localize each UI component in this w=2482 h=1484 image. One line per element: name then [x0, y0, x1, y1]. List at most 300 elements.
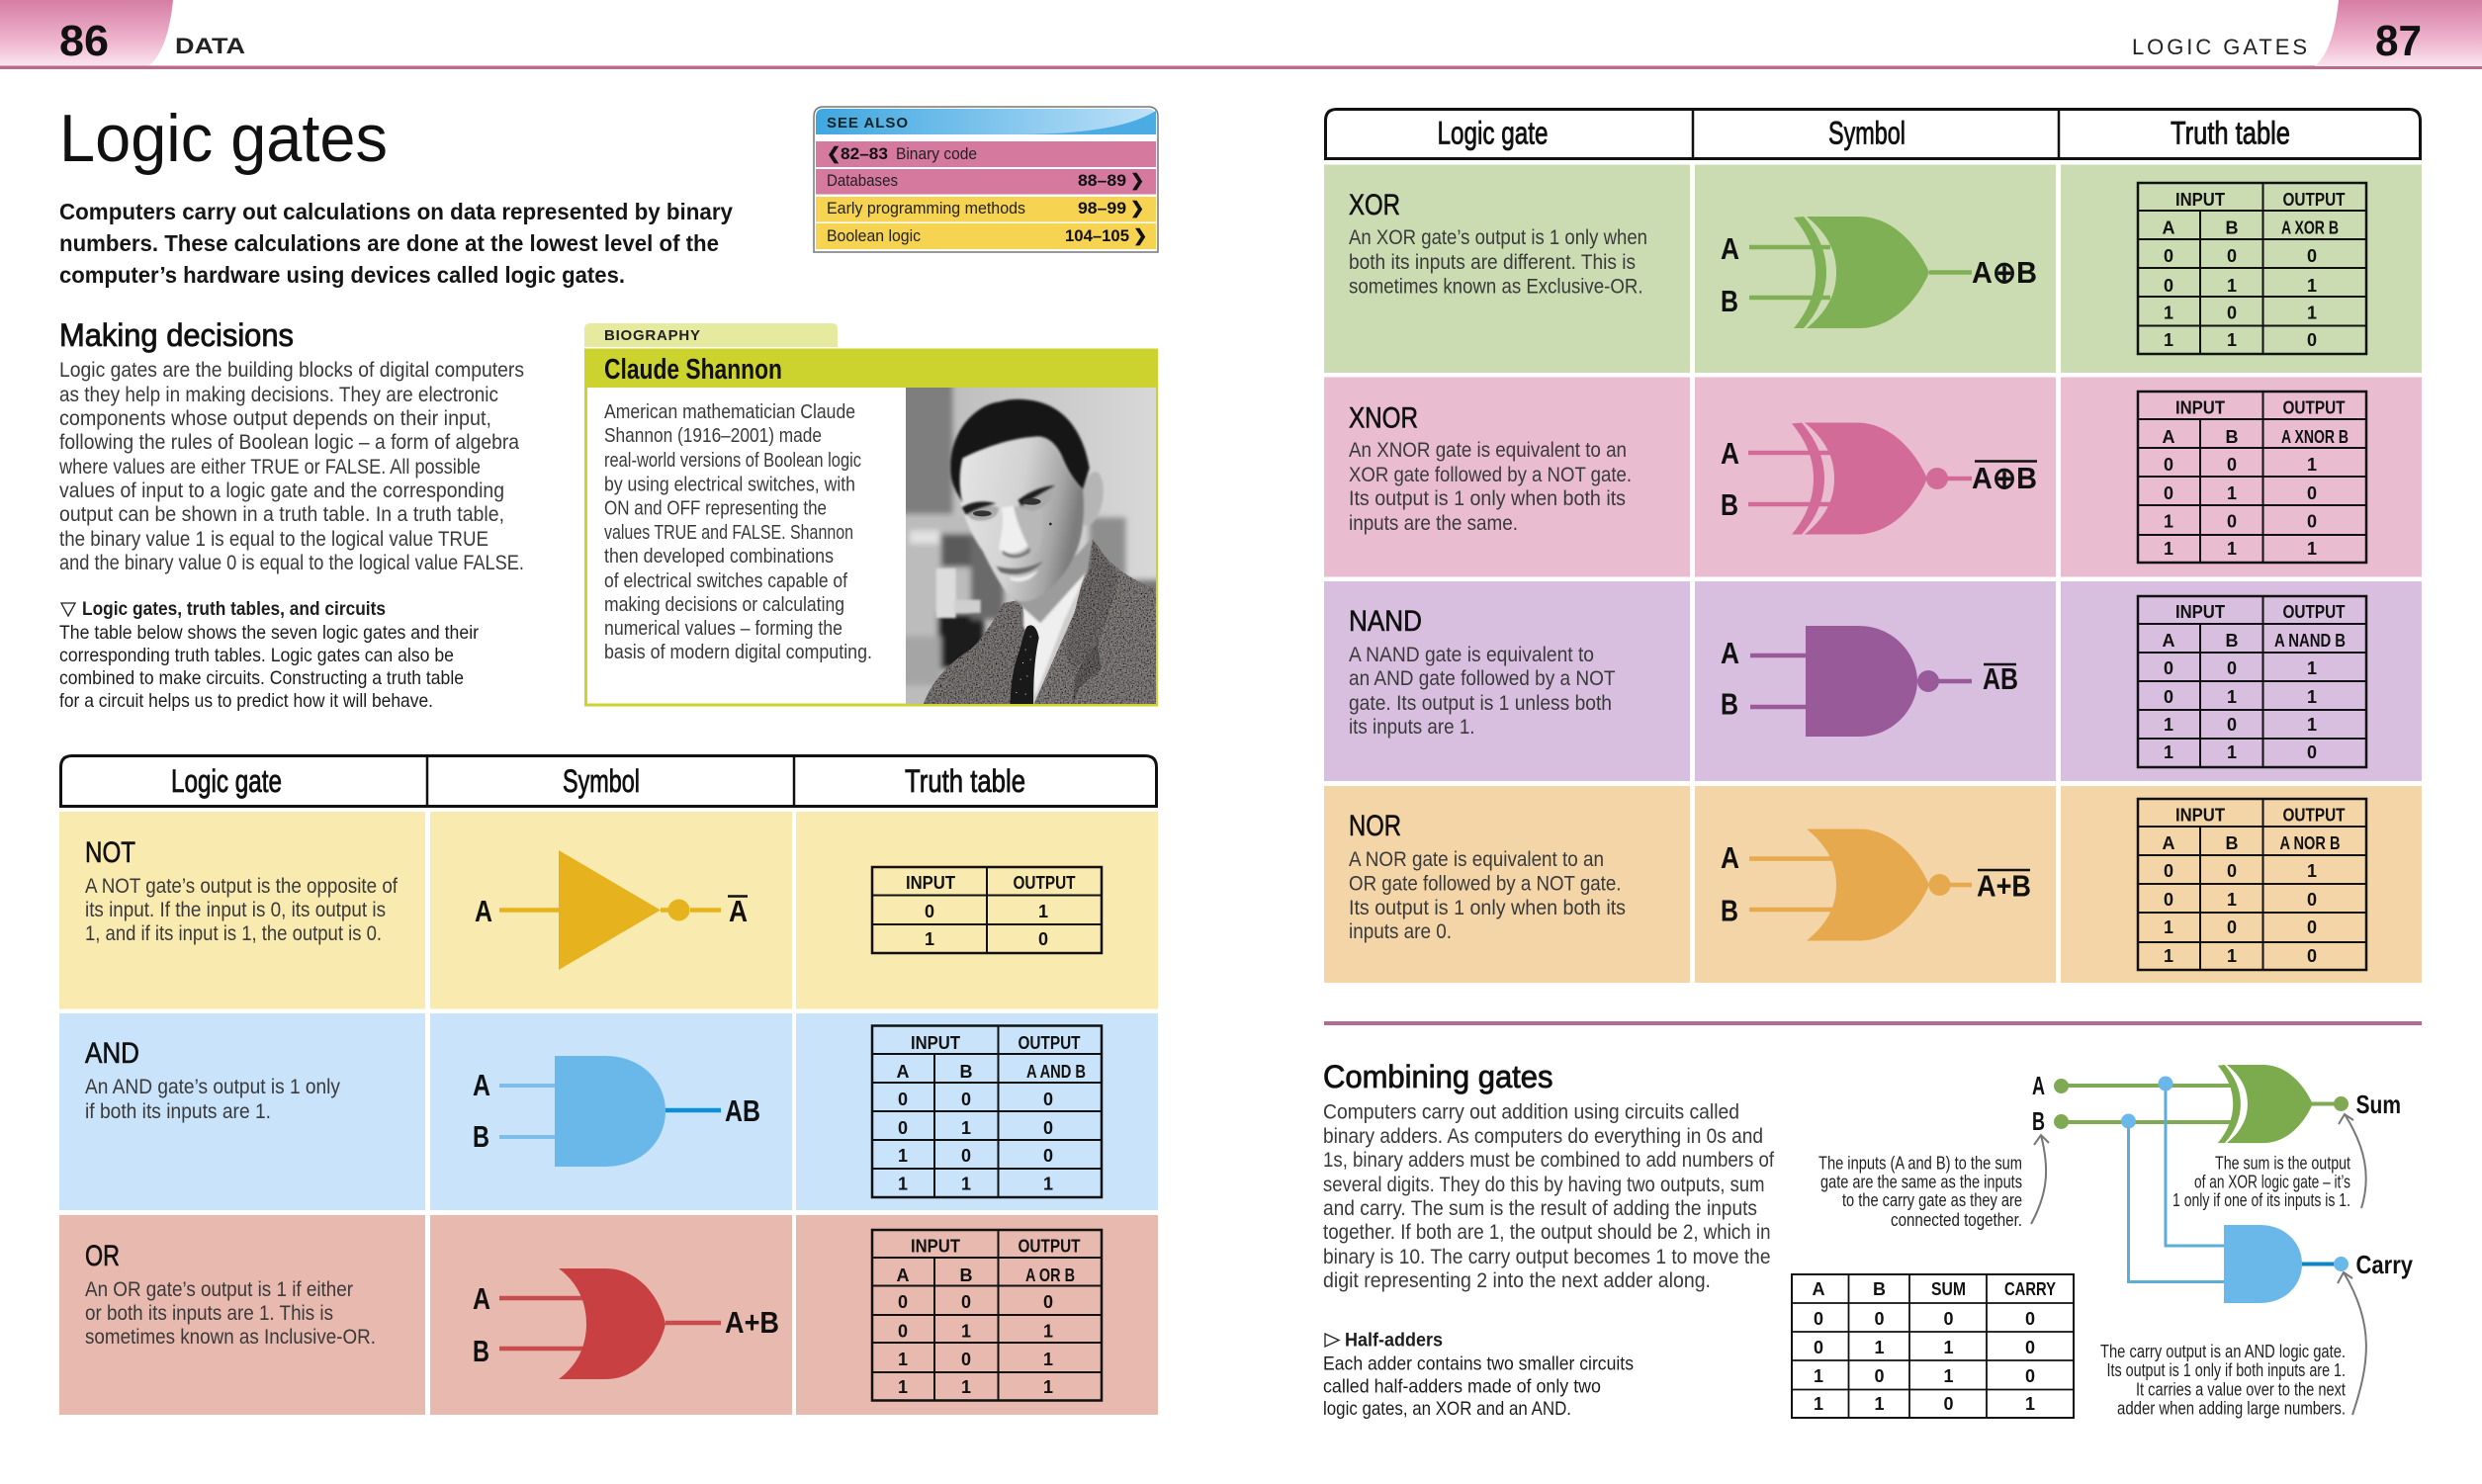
panel: XNOR gate row: Its output is 1 only when both its: [1349, 487, 1626, 510]
text block: making decisions body: Logic gates are the building blocks of digital computers: [59, 359, 524, 382]
icon: AND gate symbol: AB: [725, 1093, 760, 1128]
text block: combining gates body: several digits. They do this by having two outputs, sum: [1323, 1174, 1764, 1196]
truth table: OR: A OR B: [1025, 1266, 1075, 1285]
truth table: XOR: 0: [2227, 246, 2237, 266]
truth table: XNOR: 1: [2227, 483, 2237, 503]
annotation: inputs: to the carry gate as they are: [1842, 1190, 2022, 1210]
icon: OR gate symbol: A: [473, 1281, 490, 1316]
annotation: sum: of an XOR logic gate – it’s: [2194, 1173, 2350, 1192]
table header: left page: Truth table: [905, 763, 1025, 799]
panel: OR gate row: An OR gate’s output is 1 if either: [85, 1278, 353, 1301]
panel: see also: SEE ALSO: [827, 115, 908, 131]
truth table: XNOR: 0: [2307, 512, 2317, 532]
panel: see also: 82–83: [841, 144, 888, 163]
icon: XNOR gate symbol: A: [1721, 436, 1739, 471]
left page header: DATA: [175, 34, 245, 58]
table header: right page: [1325, 109, 2421, 159]
truth table: OR: 0: [898, 1321, 908, 1341]
truth table: AND: 0: [1043, 1090, 1053, 1109]
panel: XNOR gate row: XOR gate followed by a NOT gate.: [1349, 464, 1632, 486]
truth table: XOR: 0: [2164, 276, 2173, 296]
truth table: NOT: [872, 867, 1102, 953]
truth table: NOR: 0: [2307, 890, 2317, 910]
icon: NOT gate symbol: [475, 850, 748, 970]
truth table: OR: 0: [898, 1292, 908, 1312]
truth table: AND: 0: [898, 1090, 908, 1109]
truth table: XOR: 1: [2227, 330, 2237, 350]
truth table: NAND: 0: [2164, 658, 2173, 678]
text block: logic gates, truth tables, and circuits: The table below shows the seven logic gates and their: [59, 622, 479, 644]
truth table: NAND: A NAND B: [2274, 631, 2346, 651]
icon: OR gate symbol: [473, 1268, 779, 1379]
truth table: OR: 1: [898, 1350, 908, 1369]
panel: biography Claude Shannon: [584, 323, 1164, 712]
truth table: XNOR: 1: [2164, 512, 2173, 532]
diagram: half-adder circuit: A: [2032, 1071, 2045, 1100]
icon: XOR gate symbol: A: [1721, 231, 1739, 266]
truth table: NOR: B: [2225, 833, 2239, 853]
truth table: half-adder: 0: [1814, 1309, 1823, 1329]
biography text: real-world versions of Boolean logic: [604, 449, 861, 472]
truth table: NAND: 0: [2227, 658, 2237, 678]
annotation: inputs: connected together.: [1891, 1210, 2022, 1230]
truth table: NOT: 0: [1038, 929, 1048, 949]
panel: see also: 98–99: [1078, 199, 1126, 218]
text block: making decisions body: and the binary value 0 is equal to the logical value FALSE.: [59, 552, 524, 574]
diagram: half-adder circuit: Carry: [2355, 1250, 2413, 1279]
right page header: LOGIC GATES: [2132, 35, 2307, 59]
truth table: XNOR: 0: [2164, 455, 2173, 475]
truth table: NOR: INPUT: [2175, 805, 2225, 825]
annotation: carry: Its output is 1 only if both inputs are 1.: [2106, 1360, 2346, 1380]
panel: see also: 104–105: [1065, 226, 1129, 245]
truth table: XOR: 0: [2307, 330, 2317, 350]
panel: XOR gate row: An XOR gate’s output is 1 only when: [1349, 226, 1647, 249]
text block: half-adders: logic gates, an XOR and an AND.: [1323, 1398, 1571, 1420]
truth table: half-adder: 0: [1943, 1394, 1954, 1414]
biography text: making decisions or calculating: [604, 593, 844, 616]
truth table: half-adder: 0: [1874, 1366, 1885, 1386]
icon: XOR gate symbol: A⊕B: [1972, 255, 2037, 290]
icon: OR gate symbol: B: [473, 1334, 489, 1368]
truth table: OR: 0: [961, 1292, 971, 1312]
truth table: NOT: OUTPUT: [1013, 873, 1076, 893]
truth table: NAND: 1: [2227, 687, 2237, 707]
truth table: NOT: INPUT: [906, 873, 955, 893]
truth table: NAND: 0: [2227, 715, 2237, 735]
truth table: NOR: OUTPUT: [2282, 805, 2346, 825]
truth table: XOR: A XOR B: [2281, 218, 2339, 237]
annotation: carry: [2100, 1342, 2346, 1418]
jacket: [923, 539, 1157, 705]
truth table: XOR: A: [2162, 218, 2175, 237]
truth table: NAND: 0: [2307, 742, 2317, 762]
truth table: AND: 0: [961, 1090, 971, 1109]
biography text: values TRUE and FALSE. Shannon: [604, 521, 853, 544]
annotation: sum: 1 only if one of its inputs is 1.: [2172, 1190, 2350, 1210]
truth table: NAND: 1: [2227, 742, 2237, 762]
truth table: OR: B: [959, 1266, 973, 1285]
truth table: OR: 1: [1043, 1321, 1053, 1341]
text block: logic gates, truth tables, and circuits: [59, 598, 479, 712]
truth table: XOR: 1: [2307, 276, 2317, 296]
truth table: AND: 1: [898, 1175, 908, 1194]
panel: XOR gate row: sometimes known as Exclusive-OR.: [1349, 275, 1643, 299]
panel: see also: ❯: [1130, 171, 1144, 191]
intro paragraph: [59, 199, 733, 288]
truth table: half-adder: SUM: [1931, 1279, 1966, 1299]
truth table: AND: OUTPUT: [1019, 1033, 1080, 1053]
face: [958, 436, 1084, 601]
truth table: NOT: 0: [925, 902, 934, 921]
truth table: half-adder: CARRY: [2004, 1279, 2056, 1299]
icon: AND gate symbol: A: [473, 1068, 490, 1102]
heading: combining gates: Combining gates: [1323, 1059, 1552, 1094]
panel: NOR gate row: Its output is 1 only when both its: [1349, 897, 1626, 919]
truth table: NAND: 1: [2307, 715, 2317, 735]
truth table: half-adder: 0: [1943, 1309, 1954, 1329]
panel: AND gate row: An AND gate’s output is 1 only: [85, 1076, 340, 1098]
icon: XOR gate symbol: B: [1721, 284, 1738, 318]
text block: logic gates, truth tables, and circuits: for a circuit helps us to predict how it will behave.: [59, 690, 433, 712]
panel: AND gate row: [59, 1013, 1158, 1210]
truth table: half-adder: 1: [1814, 1394, 1823, 1414]
right page header: [2132, 0, 2482, 66]
text block: making decisions body: following the rules of Boolean logic – a form of algebra: [59, 431, 519, 454]
icon: XNOR gate symbol: A⊕B: [1972, 461, 2037, 495]
panel: NAND gate row: its inputs are 1.: [1349, 716, 1475, 739]
icon: NOR gate symbol: A+B: [1977, 868, 2031, 904]
panel: XNOR gate row: XNOR: [1349, 401, 1418, 435]
intro paragraph: Computers carry out calculations on data represented by binary: [59, 199, 733, 224]
truth table: AND: 0: [898, 1118, 908, 1138]
biography text: ON and OFF representing the: [604, 496, 827, 520]
panel: NOR gate row: NOR: [1349, 810, 1401, 842]
table header: left page: [61, 755, 1157, 807]
panel: XNOR gate row: An XNOR gate is equivalent to an: [1349, 439, 1627, 462]
truth table: NOT: 1: [925, 929, 934, 949]
truth table: half-adder: [1792, 1274, 2074, 1418]
truth table: NAND: 1: [2164, 742, 2173, 762]
truth table: half-adder: 1: [1814, 1366, 1823, 1386]
truth table: AND: A: [896, 1062, 910, 1082]
truth table: XNOR: 0: [2307, 483, 2317, 503]
text block: half-adders: Each adder contains two smaller circuits: [1323, 1353, 1634, 1374]
truth table: NAND: INPUT: [2175, 602, 2225, 622]
biography text: American mathematician Claude: [604, 400, 855, 423]
truth table: NOR: 0: [2227, 861, 2237, 881]
truth table: OR: INPUT: [911, 1236, 960, 1256]
icon: NAND gate symbol: AB: [1983, 661, 2018, 696]
truth table: XNOR: OUTPUT: [2282, 397, 2346, 417]
text block: half-adders: Half-adders: [1345, 1329, 1443, 1351]
truth table: XOR: 0: [2227, 303, 2237, 322]
text block: logic gates, truth tables, and circuits: combined to make circuits. Constructing a truth table: [59, 667, 464, 689]
truth table: AND: A AND B: [1026, 1062, 1086, 1082]
truth table: half-adder: 0: [2025, 1338, 2035, 1357]
panel: NAND gate row: NAND: [1349, 605, 1422, 638]
truth table: NAND: 1: [2164, 715, 2173, 735]
heading: making decisions: Making decisions: [59, 317, 294, 353]
truth table: XOR: B: [2225, 218, 2239, 237]
biography text: [604, 400, 872, 663]
truth table: XNOR: 1: [2307, 539, 2317, 559]
panel: OR gate row: OR: [85, 1240, 120, 1272]
intro paragraph: numbers. These calculations are done at the lowest level of the: [59, 230, 719, 256]
truth table: NAND: 0: [2164, 687, 2173, 707]
annotation: carry: The carry output is an AND logic gate.: [2100, 1342, 2346, 1361]
truth table: NOR: 0: [2164, 861, 2173, 881]
truth table: AND: 1: [898, 1146, 908, 1166]
truth table: NOR: 0: [2227, 917, 2237, 937]
truth table: NOR: 1: [2164, 946, 2173, 966]
panel: XOR gate row: both its inputs are different. This is: [1349, 251, 1636, 274]
annotation: inputs: The inputs (A and B) to the sum: [1818, 1153, 2022, 1173]
truth table: AND: B: [959, 1062, 973, 1082]
truth table: OR: 1: [898, 1377, 908, 1397]
truth table: AND: 0: [1043, 1146, 1053, 1166]
left page header: [0, 0, 2482, 69]
diagram: half-adder circuit: [2032, 1065, 2413, 1303]
text block: making decisions body: as they help in making decisions. They are electronic: [59, 384, 498, 406]
truth table: NAND: OUTPUT: [2282, 602, 2346, 622]
truth table: AND: 1: [961, 1118, 971, 1138]
truth table: half-adder: 0: [2025, 1309, 2035, 1329]
icon: NAND gate symbol: B: [1721, 686, 1738, 722]
panel: see also: Binary code: [896, 144, 977, 163]
annotation: sum: [2172, 1153, 2350, 1210]
text block: logic gates, truth tables, and circuits: corresponding truth tables. Logic gates can also be: [59, 645, 454, 666]
truth table: OR: A: [896, 1266, 910, 1285]
truth table: AND: 0: [961, 1146, 971, 1166]
truth table: XNOR: A XNOR B: [2281, 427, 2349, 447]
text block: making decisions body: where values are either TRUE or FALSE. All possible: [58, 456, 481, 479]
panel: see also: ❯: [1133, 226, 1147, 246]
truth table: XNOR: 0: [2227, 512, 2237, 532]
text block: making decisions body: the binary value 1 is equal to the logical value TRUE: [59, 528, 488, 551]
annotation: carry: adder when adding large numbers.: [2117, 1398, 2346, 1418]
truth table: XOR: 1: [2227, 276, 2237, 296]
panel: NAND gate row: an AND gate followed by a NOT: [1349, 667, 1616, 690]
truth table: NOR: 1: [2227, 890, 2237, 910]
diagram: half-adder circuit: Sum: [2355, 1090, 2401, 1119]
icon: AND gate symbol: [473, 1056, 760, 1167]
annotation: inputs: [1818, 1153, 2022, 1230]
panel: see also: ❯: [1130, 199, 1144, 218]
biography text: by using electrical switches, with: [604, 473, 855, 496]
table header: right page: Symbol: [1828, 115, 1906, 150]
truth table: NAND: 1: [2307, 687, 2317, 707]
truth table: XOR: 0: [2307, 246, 2317, 266]
panel: XNOR gate row: [1324, 378, 2422, 577]
truth table: XNOR: 1: [2227, 539, 2237, 559]
panel: NOT gate row: A NOT gate’s output is the opposite of: [85, 875, 398, 898]
truth table: XNOR: [2138, 392, 2366, 563]
truth table: XNOR: INPUT: [2175, 397, 2225, 417]
truth table: XOR: [2138, 183, 2366, 354]
tie: [1011, 625, 1039, 705]
text block: combining gates body: 1s, binary adders must be combined to add numbers of: [1323, 1149, 1774, 1172]
left page header: 86: [59, 17, 109, 65]
panel: NOR gate row: inputs are 0.: [1349, 920, 1452, 943]
photo: portrait of Claude Shannon: [906, 388, 1156, 704]
title: Logic gates: [59, 101, 388, 176]
panel: NAND gate row: [1324, 581, 2422, 781]
panel: NOT gate row: [59, 812, 1158, 1008]
text block: combining gates body: binary is 10. The carry output becomes 1 to move the: [1323, 1246, 1770, 1268]
panel: XOR gate row: XOR: [1349, 189, 1400, 221]
truth table: NOR: A NOR B: [2280, 833, 2340, 853]
icon: NOT gate symbol: A: [729, 894, 748, 928]
truth table: half-adder: 1: [1874, 1338, 1885, 1357]
icon: NAND gate symbol: [1721, 626, 2018, 737]
truth table: NOR: 1: [2164, 917, 2173, 937]
panel: XNOR gate row: inputs are the same.: [1349, 512, 1518, 535]
panel: OR gate row: [59, 1215, 1158, 1415]
truth table: OR: 1: [961, 1377, 971, 1397]
icon: XNOR gate symbol: B: [1721, 487, 1738, 522]
truth table: half-adder: 1: [1874, 1394, 1885, 1414]
arrow: carry: [2338, 1272, 2366, 1415]
text block: making decisions body: values of input to a logic gate and the corresponding: [59, 480, 504, 502]
text block: combining gates body: Computers carry out addition using circuits called: [1323, 1101, 1739, 1123]
icon: XOR gate symbol: [1721, 217, 2037, 328]
truth table: half-adder: 1: [2025, 1394, 2035, 1414]
panel: see also: ❮: [827, 144, 841, 164]
arrow: sum: [2339, 1114, 2366, 1208]
biography text: basis of modern digital computing.: [604, 641, 872, 663]
text block: making decisions body: components whose output depends on their input,: [59, 407, 491, 430]
panel: see also: 88–89: [1078, 171, 1126, 190]
truth table: NOR: [2138, 799, 2366, 970]
truth table: half-adder: 0: [1814, 1338, 1823, 1357]
truth table: XNOR: 1: [2307, 455, 2317, 475]
text block: combining gates body: [1323, 1101, 1774, 1292]
truth table: OR: [872, 1230, 1102, 1400]
photo background: [906, 388, 1156, 686]
truth table: XNOR: B: [2225, 427, 2239, 447]
truth table: AND: 1: [961, 1175, 971, 1194]
panel: AND gate row: if both its inputs are 1.: [85, 1100, 271, 1123]
truth table: OR: 0: [1043, 1292, 1053, 1312]
icon: NOR gate symbol: [1721, 829, 2031, 941]
truth table: XOR: INPUT: [2175, 190, 2225, 210]
icon: NOT gate symbol: A: [475, 894, 492, 928]
panel: NOR gate row: [1324, 786, 2422, 983]
text block: logic gates, truth tables, and circuits: Logic gates, truth tables, and circuits: [82, 598, 386, 620]
panel: see also: [814, 107, 1158, 252]
intro paragraph: computer’s hardware using devices called logic gates.: [59, 262, 625, 288]
panel: see also: Boolean logic: [827, 226, 921, 245]
annotation: inputs: gate are the same as the inputs: [1820, 1173, 2022, 1192]
text block: half-adders: called half-adders made of only two: [1323, 1376, 1601, 1398]
panel: NOT gate row: 1, and if its input is 1, the output is 0.: [85, 922, 382, 945]
text block: half-adders: [1323, 1329, 1634, 1420]
truth table: NOR: 0: [2164, 890, 2173, 910]
truth table: AND: [872, 1026, 1102, 1197]
truth table: NAND: [2138, 596, 2366, 767]
panel: see also: Early programming methods: [827, 199, 1025, 218]
icon: NOR gate symbol: A: [1721, 840, 1739, 875]
panel: NAND gate row: gate. Its output is 1 unless both: [1349, 692, 1612, 715]
truth table: half-adder: 1: [1943, 1338, 1954, 1357]
truth table: XOR: 0: [2164, 246, 2173, 266]
truth table: XNOR: 1: [2164, 539, 2173, 559]
truth table: XOR: 1: [2307, 303, 2317, 322]
truth table: NAND: 1: [2307, 658, 2317, 678]
text block: combining gates body: binary adders. As computers do everything in 0s and: [1323, 1125, 1763, 1148]
panel: NOT gate row: NOT: [85, 836, 135, 869]
icon: NAND gate symbol: A: [1721, 636, 1739, 670]
truth table: NOT: 1: [1038, 902, 1048, 921]
biography text: of electrical switches capable of: [604, 569, 847, 592]
text block: combining gates body: together. If both are 1, the output should be 2, which in: [1323, 1221, 1770, 1244]
table header: left page: Logic gate: [171, 763, 282, 799]
biography text: Shannon (1916–2001) made: [604, 424, 822, 447]
truth table: half-adder: B: [1873, 1279, 1886, 1299]
truth table: OR: 1: [1043, 1350, 1053, 1369]
right page header: 87: [2375, 17, 2422, 65]
truth table: XNOR: A: [2162, 427, 2175, 447]
truth table: OR: 1: [1043, 1377, 1053, 1397]
diagram: half-adder circuit: B: [2032, 1106, 2045, 1136]
truth table: NOR: A: [2162, 833, 2175, 853]
truth table: NAND: A: [2162, 631, 2175, 651]
biography text: numerical values – forming the: [604, 617, 842, 640]
truth table: half-adder: A: [1812, 1279, 1825, 1299]
arrow: inputs to B: [2031, 1135, 2049, 1224]
panel: AND gate row: AND: [85, 1037, 139, 1070]
panel: biography Claude Shannon: BIOGRAPHY: [604, 327, 700, 344]
icon: NOR gate symbol: B: [1721, 894, 1738, 927]
annotation: carry: It carries a value over to the next: [2136, 1380, 2346, 1400]
truth table: half-adder: 0: [1874, 1309, 1885, 1329]
text block: making decisions body: [58, 359, 524, 574]
table header: right page: Logic gate: [1438, 115, 1549, 150]
text block: making decisions body: output can be shown in a truth table. In a truth table,: [59, 503, 504, 526]
truth table: half-adder: 1: [1943, 1366, 1954, 1386]
panel: NOR gate row: A NOR gate is equivalent to an: [1349, 848, 1604, 871]
biography text: then developed combinations: [604, 545, 834, 567]
text block: combining gates body: and carry. The sum is the result of adding the inputs: [1323, 1197, 1757, 1220]
panel: XOR gate row: [1324, 164, 2422, 373]
panel: NOT gate row: its input. If the input is 0, its output is: [85, 899, 386, 921]
panel: OR gate row: sometimes known as Inclusive-OR.: [85, 1326, 376, 1349]
panel: OR gate row: or both its inputs are 1. This is: [85, 1302, 333, 1325]
text block: combining gates body: digit representing 2 into the next adder along.: [1323, 1269, 1711, 1292]
truth table: OR: OUTPUT: [1019, 1236, 1080, 1256]
truth table: NOR: 1: [2227, 946, 2237, 966]
truth table: XOR: 1: [2164, 330, 2173, 350]
panel: NAND gate row: A NAND gate is equivalent to: [1349, 644, 1594, 666]
panel: see also: Databases: [827, 171, 898, 190]
truth table: XNOR: 0: [2164, 483, 2173, 503]
icon: XNOR gate symbol: [1721, 423, 2037, 534]
icon: OR gate symbol: A+B: [725, 1305, 779, 1340]
panel: NOR gate row: OR gate followed by a NOT gate.: [1349, 872, 1622, 896]
truth table: XOR: 1: [2164, 303, 2173, 322]
annotation: sum: The sum is the output: [2215, 1153, 2350, 1173]
truth table: AND: 0: [1043, 1118, 1053, 1138]
truth table: NOR: 0: [2307, 946, 2317, 966]
truth table: XOR: OUTPUT: [2282, 190, 2346, 210]
truth table: OR: 0: [961, 1350, 971, 1369]
truth table: NAND: B: [2225, 631, 2239, 651]
icon: AND gate symbol: B: [473, 1119, 489, 1154]
table header: left page: Symbol: [563, 763, 640, 799]
truth table: NOR: 0: [2307, 917, 2317, 937]
truth table: half-adder: 0: [2025, 1366, 2035, 1386]
